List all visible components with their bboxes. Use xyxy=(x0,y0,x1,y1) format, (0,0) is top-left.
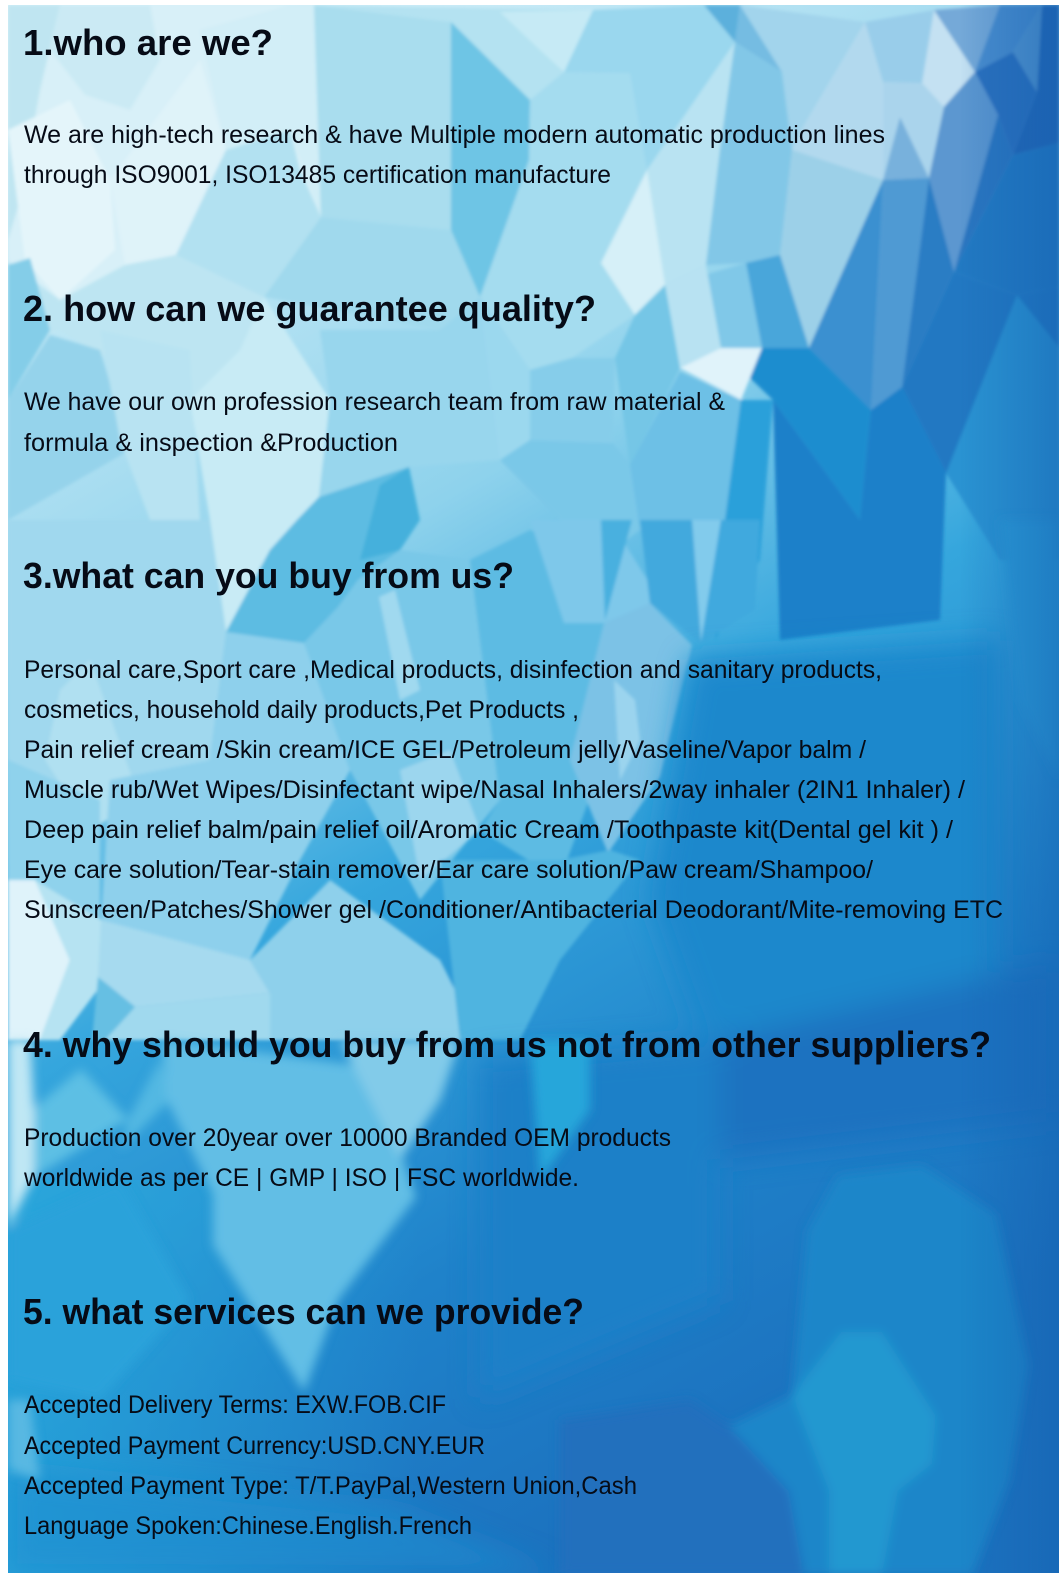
section 3: products xyxy=(23,555,1003,924)
body text 2 xyxy=(24,388,725,457)
body text 5: terms list: Accepted Payment Currency:USD.CNY.EUR xyxy=(24,1432,485,1460)
heading 1: 1.who are we? xyxy=(23,22,273,63)
body text 3: product list: Deep pain relief balm/pain relief oil/Aromatic Cream /Toothpaste kit(Dental gel kit ) / xyxy=(24,816,953,844)
body text 3: product list: cosmetics, household daily products,Pet Products , xyxy=(24,696,579,724)
body text 4: Production over 20year over 10000 Branded OEM products xyxy=(24,1124,671,1152)
body text 5: terms list: Accepted Delivery Terms: EXW.FOB.CIF xyxy=(24,1391,446,1419)
heading 2: 2. how can we guarantee quality? xyxy=(23,288,596,329)
section 1: who are we xyxy=(23,22,885,189)
body text 4 xyxy=(23,1124,671,1192)
body text 3: product list: Pain relief cream /Skin cream/ICE GEL/Petroleum jelly/Vaseline/Vapor balm / xyxy=(24,736,866,764)
body text 5: terms list xyxy=(24,1391,637,1540)
body text 2: formula & inspection &Production xyxy=(24,429,398,457)
body text 5: terms list: Language Spoken:Chinese.English.French xyxy=(24,1512,472,1540)
body text 3: product list: Personal care,Sport care ,Medical products, disinfection and sanitary products, xyxy=(24,656,882,684)
section 5: services xyxy=(23,1291,637,1540)
body text 4: worldwide as per CE | GMP | ISO | FSC worldwide. xyxy=(23,1164,579,1192)
body text 3: product list: Sunscreen/Patches/Shower gel /Conditioner/Antibacterial Deodorant/Mite-removing ETC xyxy=(24,896,1003,924)
heading 5: 5. what services can we provide? xyxy=(23,1291,584,1332)
heading 4: 4. why should you buy from us not from other suppliers? xyxy=(23,1024,991,1065)
body text 3: product list xyxy=(24,656,1003,924)
body text 1: through ISO9001, ISO13485 certification manufacture xyxy=(24,161,611,189)
body text 1 xyxy=(24,121,885,189)
heading 3: 3.what can you buy from us? xyxy=(23,555,514,596)
section 4: why us xyxy=(23,1024,991,1192)
body text 3: product list: Eye care solution/Tear-stain remover/Ear care solution/Paw cream/Shampoo/ xyxy=(24,856,873,884)
section 2: quality xyxy=(23,288,725,457)
body text 2: We have our own profession research team from raw material & xyxy=(24,388,725,416)
body text 3: product list: Muscle rub/Wet Wipes/Disinfectant wipe/Nasal Inhalers/2way inhaler (2IN1 Inhaler) / xyxy=(24,776,965,804)
body text 5: terms list: Accepted Payment Type: T/T.PayPal,Western Union,Cash xyxy=(24,1472,637,1500)
body text 1: We are high-tech research & have Multiple modern automatic production lines xyxy=(24,121,885,149)
